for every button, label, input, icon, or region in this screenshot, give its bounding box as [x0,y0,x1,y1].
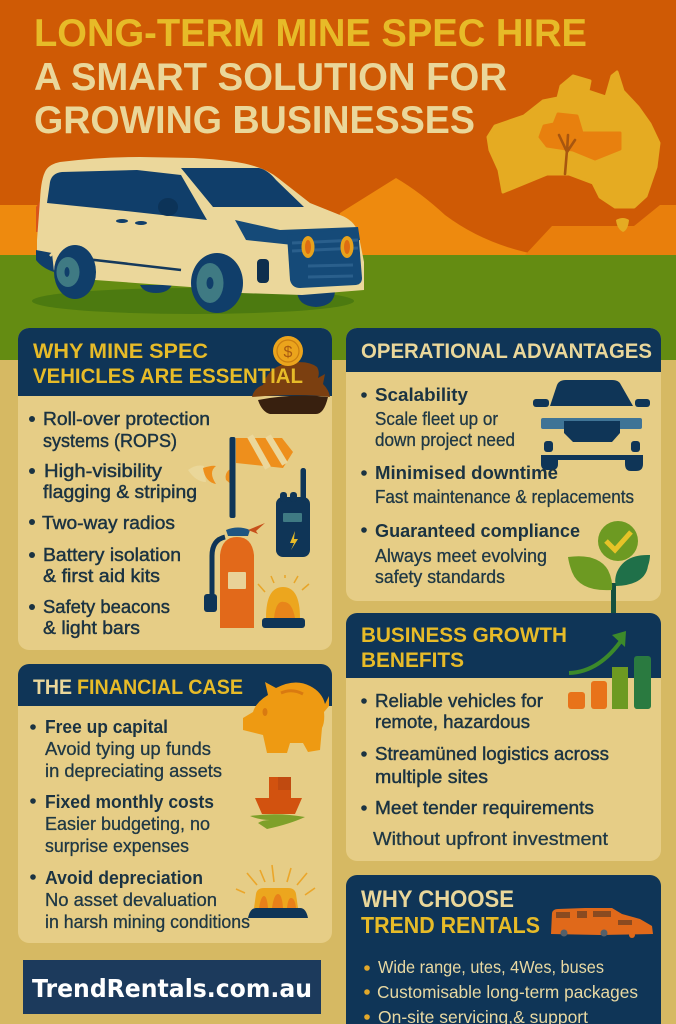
website banner [23,960,321,1014]
icon: down arrow on leaf [250,777,305,829]
background scene [0,0,676,360]
benefits list: Without upfront investment [373,829,608,849]
advantages list [361,384,634,587]
financial benefits list: in depreciating assets [45,761,222,781]
header bar [18,328,332,396]
panel: business growth benefits [346,613,661,861]
panel: why choose trend rentals [346,875,661,1024]
benefits list: remote, hazardous [375,711,530,732]
advantages list: Scale fleet up or [375,409,498,429]
safety features list: flagging & striping [43,481,197,502]
financial benefits list: surprise expenses [45,836,189,856]
icon: vehicle front [533,380,650,471]
icon: fire extinguisher [204,523,265,628]
panel: why mine spec vehicles are essential [18,328,332,650]
reasons list: Wide range, utes, 4Wes, buses [378,957,604,977]
heading: TREND RENTALS [361,912,540,938]
icon: growth bar chart with arrow [568,631,651,709]
advantages list: Scalability [375,384,469,405]
title: A SMART SOLUTION FOR [34,56,507,99]
benefits list: Meet tender requirements [375,797,594,818]
header [18,664,332,706]
financial benefits list: Avoid tying up funds [45,739,211,759]
header: OPERATIONAL ADVANTAGES [361,340,652,363]
icon: hard hat and coin: $ [284,344,293,361]
icon: amber light bar [236,865,315,918]
icon: hard hat and coin [252,336,330,414]
safety features list: & first aid kits [43,565,160,586]
header text: VEHICLES ARE ESSENTIAL [33,365,303,388]
advantages list: safety standards [375,567,505,587]
safety features list: Roll-over protection [43,408,210,429]
title: LONG-TERM MINE SPEC HIRE [34,12,587,55]
advantages list: Guaranteed compliance [375,520,580,541]
advantages list: Minimised downtime [375,462,558,483]
safety features list: & light bars [43,617,140,638]
advantages list: Always meet evolving [375,546,547,566]
title: GROWING BUSINESSES [34,99,475,142]
financial benefits list: Avoid depreciation [45,867,203,888]
heading [361,886,540,938]
safety features list: systems (ROPS) [43,430,177,451]
header [346,328,661,372]
financial benefits list: No asset devaluation [45,890,217,910]
heading: WHY CHOOSE [361,886,514,913]
advantages list: down project need [375,430,515,450]
safety features list: High-visibility [44,460,163,481]
icon: two-way radio [276,468,310,557]
icon: safety beacon [258,575,309,628]
van illustration [32,157,364,314]
reasons list: Customisable long-term packages [377,982,638,1002]
title [34,12,587,142]
benefits list [361,690,609,849]
financial benefits list: Free up capital [45,716,168,737]
header: BUSINESS GROWTH [361,624,567,647]
financial benefits list: Easier budgeting, no [45,814,210,834]
safety features list [29,408,210,638]
website banner: TrendRentals.com.au [32,974,312,1003]
benefits list: Streamüned logistics across [375,743,609,764]
panel: the financial case [18,664,332,943]
icon: Australia map with tree [488,72,659,232]
panel: operational advantages [346,328,661,615]
safety features list: Safety beacons [43,596,170,617]
icon: warning flag [188,436,293,518]
icon: piggy bank [243,682,329,753]
header [346,613,661,678]
header text [33,340,303,388]
header: BENEFITS [361,649,464,672]
financial benefits list [30,716,250,932]
financial benefits list: in harsh mining conditions [45,912,250,932]
financial benefits list: Fixed monthly costs [45,791,214,812]
benefits list: Reliable vehicles for [375,690,543,711]
header text: WHY MINE SPEC [33,340,208,363]
header: THE [33,676,72,699]
icon: compliance check and leaves [568,521,650,615]
benefits list: multiple sites [375,766,488,787]
safety features list: Battery isolation [43,544,181,565]
icon: orange vehicle fleet [551,908,653,938]
header: FINANCIAL CASE [77,676,243,699]
safety features list: Two-way radios [42,512,175,533]
advantages list: Fast maintenance & replacements [375,487,634,507]
reasons list [364,957,638,1024]
